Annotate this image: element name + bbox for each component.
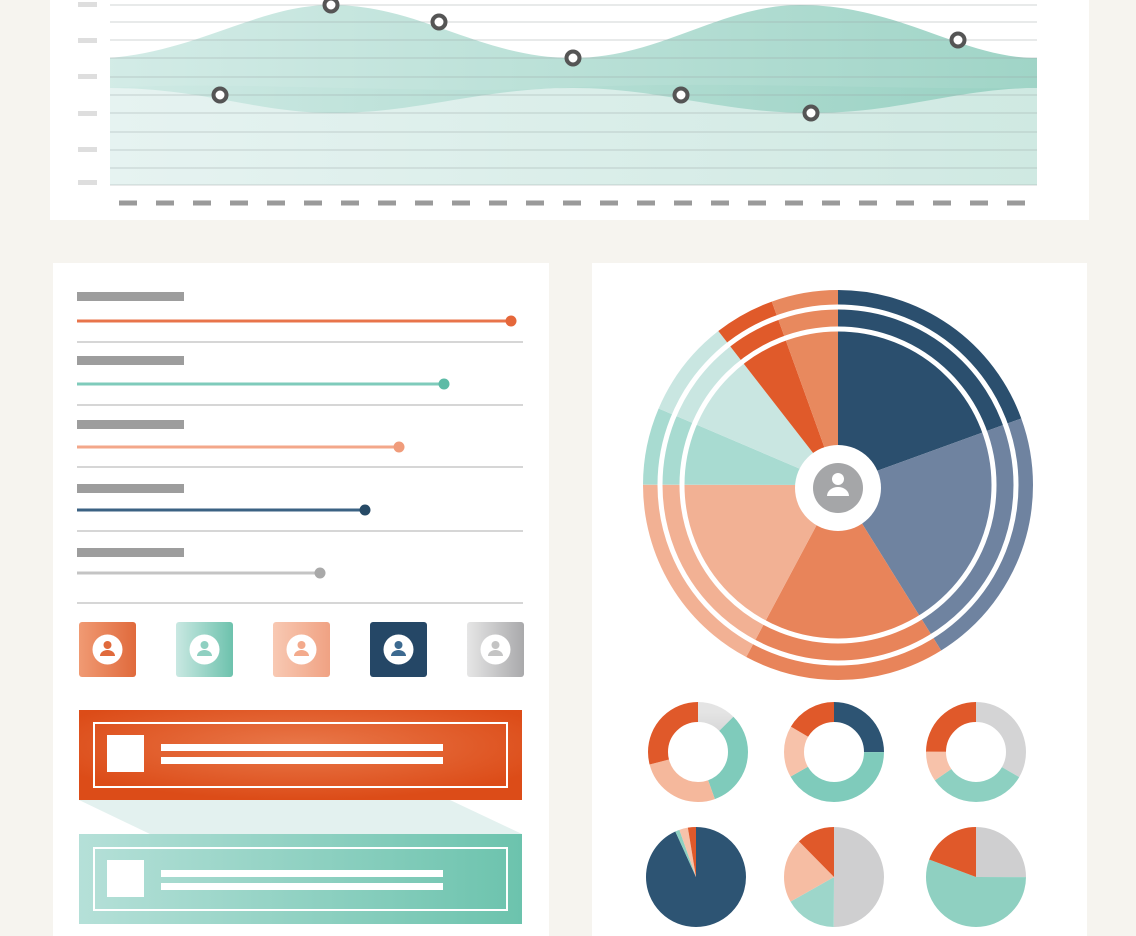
banner: teal xyxy=(79,834,522,924)
icon row xyxy=(79,622,524,677)
progress bar 1 xyxy=(77,292,516,326)
icon: user center xyxy=(795,445,881,531)
progress bar 5 xyxy=(77,548,326,578)
area: light base xyxy=(110,85,1037,185)
progress bar 4 xyxy=(77,484,370,516)
panel: line chart xyxy=(50,0,1089,220)
donut 2 xyxy=(794,712,874,792)
donut 3 xyxy=(936,712,1016,792)
pie 5 xyxy=(809,852,859,902)
progress bar 2 xyxy=(77,356,450,390)
panel: progress bars and banners xyxy=(53,263,549,936)
progress bar 3 xyxy=(77,420,404,452)
donut 1 xyxy=(658,712,738,792)
pie 4 xyxy=(671,852,721,902)
banner: orange xyxy=(79,710,522,800)
connector xyxy=(79,800,522,834)
area: wave band xyxy=(110,5,1037,113)
pie 6 xyxy=(951,852,1001,902)
big pie chart xyxy=(740,388,936,582)
y axis ticks xyxy=(78,2,97,185)
x axis dashes xyxy=(119,200,1030,206)
data points xyxy=(214,0,964,120)
panel: pie charts xyxy=(592,263,1087,936)
